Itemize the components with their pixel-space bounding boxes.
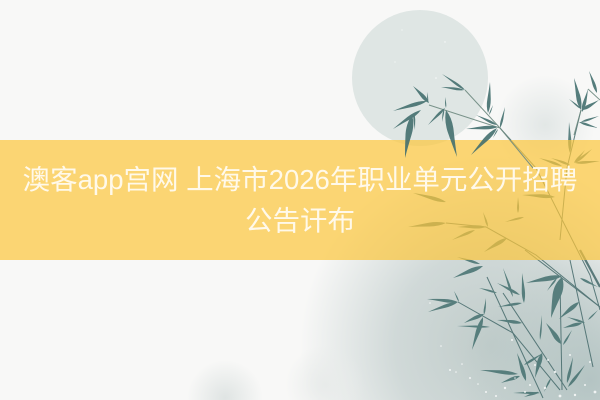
banner band (0, 140, 600, 260)
pale moon circle (352, 10, 488, 146)
bamboo in front of the banner: upper leaves (392, 70, 600, 168)
bamboo behind the banner (408, 110, 600, 398)
speckles of white spray (394, 29, 596, 397)
title text: 澳客app宫网 上海市2026年职业单元公开招聘公告讦布 (23, 164, 577, 236)
